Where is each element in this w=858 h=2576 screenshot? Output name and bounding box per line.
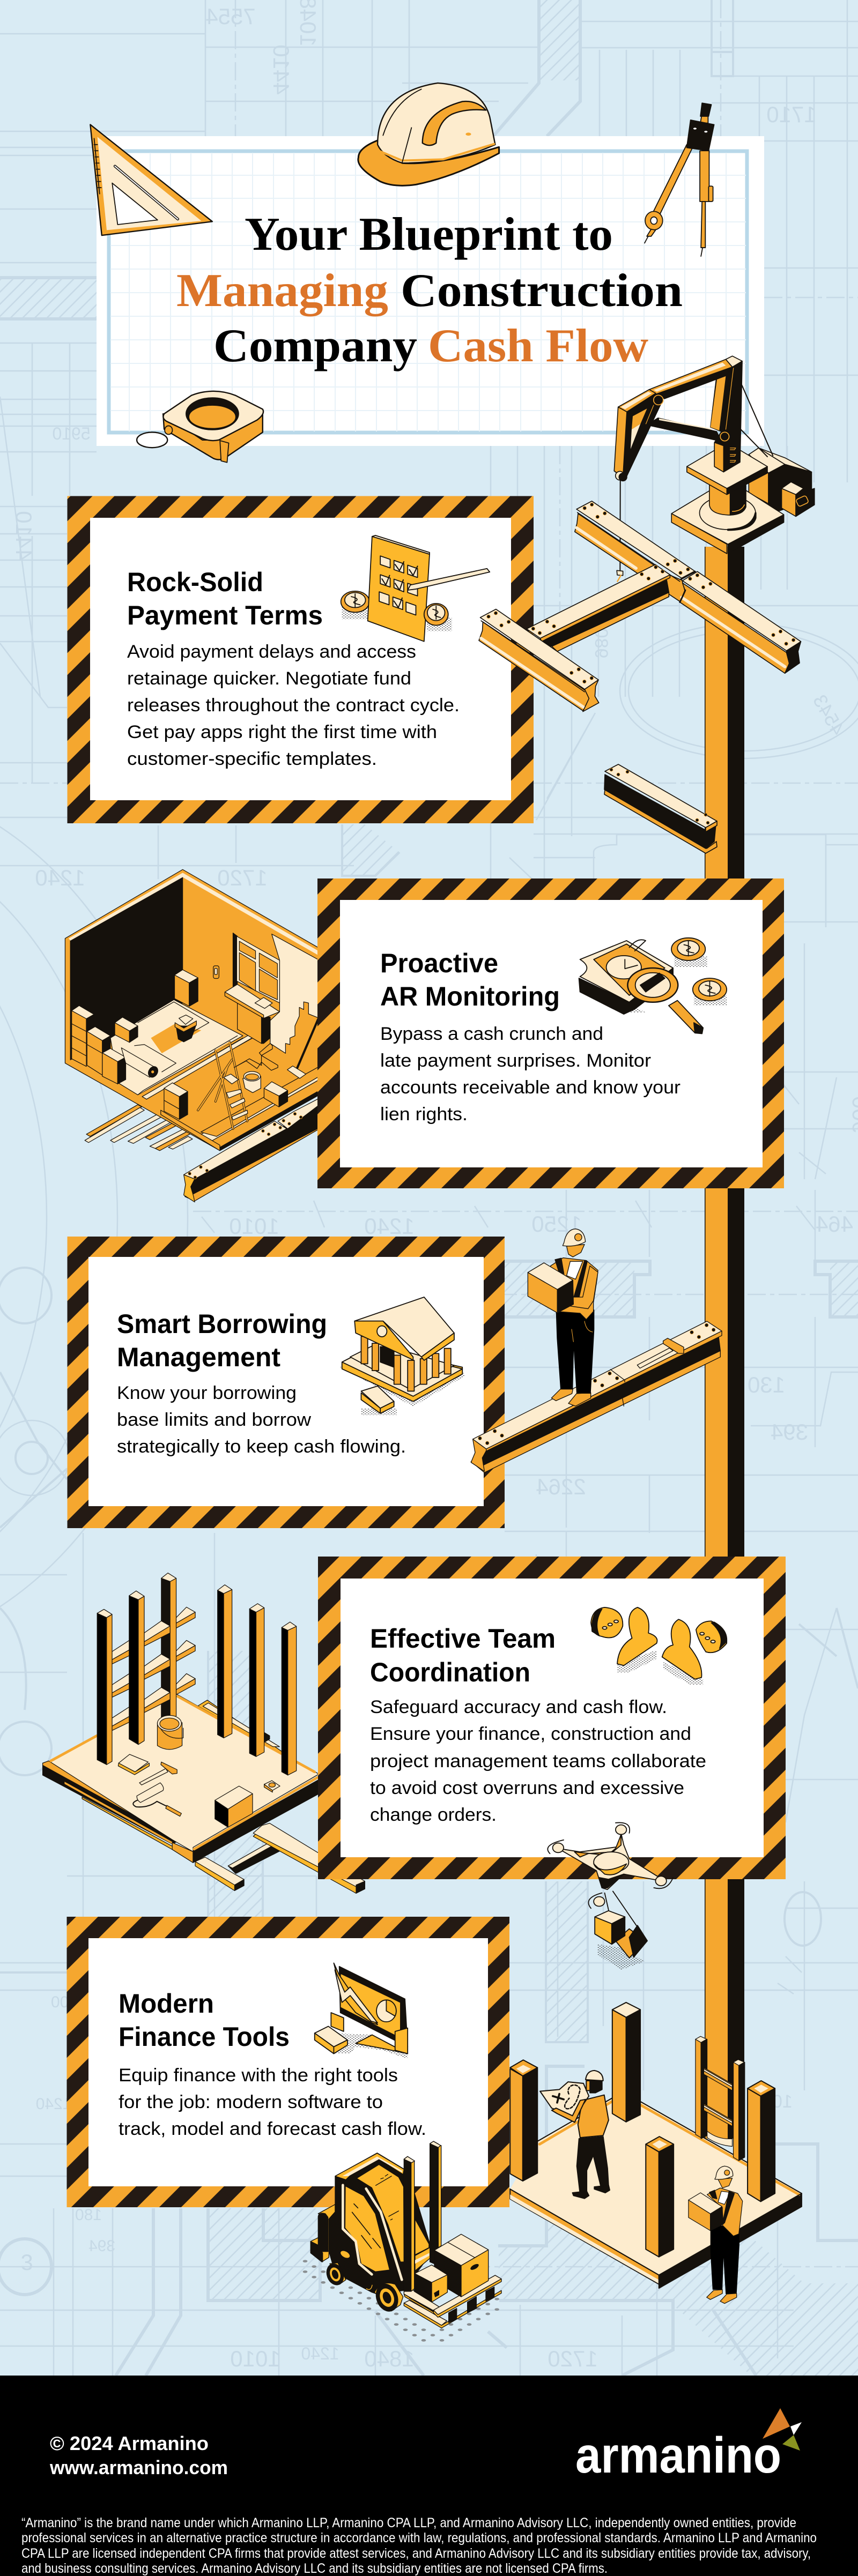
copyright and website: www.armanino.com bbox=[49, 2456, 228, 2478]
body text: base limits and borrow bbox=[117, 1410, 311, 1430]
paint bucket bbox=[157, 1715, 183, 1749]
crane cables bbox=[741, 384, 773, 457]
short left beam bbox=[479, 609, 599, 712]
heading: Rock-Solid bbox=[127, 567, 263, 597]
crane mast and boom bbox=[614, 356, 742, 480]
Armanino logo: armanino bbox=[575, 2427, 781, 2484]
crane upper plate bbox=[687, 450, 767, 495]
body text: project management teams collaborate bbox=[370, 1751, 706, 1771]
worker with map bbox=[540, 2071, 610, 2199]
drone shadow dots bbox=[597, 1944, 645, 1970]
blueprint background drawing: 7554 bbox=[205, 4, 256, 29]
steel tower column bbox=[705, 547, 744, 2139]
body text: change orders. bbox=[370, 1805, 497, 1825]
legal disclaimer: and business consulting services. Armanino Advisory LLC and its subsidiary entities are not licensed CPA firms. bbox=[21, 2561, 608, 2576]
drone cables bbox=[605, 1891, 638, 1927]
panel: Smart Borrowing Management bbox=[68, 1237, 505, 1528]
copyright and website bbox=[49, 2432, 228, 2478]
window and sill bbox=[213, 933, 279, 1044]
body text: Avoid payment delays and access bbox=[127, 642, 416, 662]
heading: Payment Terms bbox=[127, 600, 323, 630]
floor planks bbox=[85, 1105, 194, 1151]
drone body bbox=[548, 1822, 673, 1908]
ladder bbox=[696, 2036, 745, 2161]
panel: Effective Team Coordination bbox=[318, 1557, 786, 1879]
illustration: worker standing on steel beam bbox=[471, 1229, 722, 1472]
panel: Proactive AR Monitoring bbox=[317, 878, 784, 1188]
blueprint background drawing: 5910 bbox=[52, 424, 91, 443]
beam rivets bbox=[487, 503, 795, 683]
illustration: delivery drone with boxes bbox=[548, 1822, 673, 1970]
blueprint background drawing: 1250 bbox=[531, 1211, 582, 1237]
pallet bbox=[404, 2275, 501, 2328]
body text: for the job: modern software to bbox=[119, 2092, 383, 2112]
pillar left bbox=[510, 2060, 537, 2181]
blueprint background drawing: 130 bbox=[748, 1372, 785, 1397]
blueprint background drawing: 2264 bbox=[536, 1474, 586, 1499]
blueprint background drawing: 3 bbox=[20, 2250, 33, 2275]
body text: Know your borrowing bbox=[117, 1383, 297, 1403]
wooden crate bbox=[215, 1786, 253, 1827]
body text: customer-specific templates. bbox=[127, 749, 377, 769]
heading bbox=[380, 948, 560, 1011]
heading: Finance Tools bbox=[119, 2022, 290, 2052]
panel: Modern Finance Tools bbox=[66, 1917, 509, 2207]
body text: retainage quicker. Negotiate fund bbox=[127, 668, 411, 689]
forklift masts bbox=[415, 2141, 441, 2271]
body text: Equip finance with the right tools bbox=[119, 2065, 398, 2086]
platform deck bbox=[43, 1694, 319, 1863]
tower base disc bbox=[707, 2131, 733, 2146]
illustration: framed floor platform with studs and tools bbox=[43, 1573, 365, 1893]
crane bbox=[614, 356, 815, 582]
heading: AR Monitoring bbox=[380, 981, 560, 1011]
blueprint background drawing: 394 bbox=[88, 2237, 115, 2255]
wheels bbox=[324, 2261, 403, 2314]
icon: tape measure bbox=[137, 391, 263, 463]
icon: drafting compass bbox=[645, 103, 714, 256]
blueprint background drawing: 180 bbox=[75, 2206, 102, 2224]
body text: to avoid cost overruns and excessive bbox=[370, 1778, 684, 1798]
wall patch bbox=[270, 934, 320, 1053]
icon: paper stack, magnifier and coins bbox=[579, 938, 727, 1033]
cab bbox=[329, 2153, 430, 2294]
body text: track, model and forecast cash flow. bbox=[119, 2119, 426, 2139]
crane hook and cable bbox=[616, 471, 627, 582]
blueprint background drawing: 1720 bbox=[548, 2346, 598, 2371]
blueprint background drawing: 1240 bbox=[364, 1213, 415, 1239]
blueprint background drawing: 4410 bbox=[11, 511, 36, 561]
blueprint background drawing: 1720 bbox=[217, 865, 268, 890]
floor cutout bbox=[234, 1044, 278, 1070]
heading: Coordination bbox=[370, 1657, 530, 1687]
body text: accounts receivable and know your bbox=[380, 1077, 681, 1098]
heading bbox=[370, 1624, 556, 1687]
steel beam bbox=[471, 1321, 722, 1472]
blueprint background drawing: 4543 bbox=[809, 691, 849, 739]
angled connecting beam bbox=[527, 564, 670, 651]
copyright and website: © 2024 Armanino bbox=[50, 2432, 209, 2454]
blueprint background drawing: 1010 bbox=[229, 1213, 279, 1239]
title heading bbox=[176, 209, 683, 372]
rails and studs bbox=[97, 1573, 297, 1775]
body text: lien rights. bbox=[380, 1104, 468, 1125]
blueprint background drawing: 1240 bbox=[301, 2344, 339, 2363]
heading: Management bbox=[117, 1342, 280, 1372]
body text: Bypass a cash crunch and bbox=[380, 1024, 603, 1044]
support beams bbox=[82, 1700, 365, 1893]
cargo boxes bbox=[415, 2234, 489, 2302]
steel beam on tower bbox=[604, 764, 717, 853]
title heading: Company bbox=[213, 320, 417, 372]
crane motor small block bbox=[782, 482, 815, 516]
worker carrying box bbox=[689, 2166, 743, 2304]
icon: checklist tablet with coins bbox=[341, 535, 490, 642]
crane lower base plate bbox=[671, 485, 784, 554]
body text: Safeguard accuracy and cash flow. bbox=[370, 1697, 667, 1717]
step ladder bbox=[198, 1043, 248, 1129]
room shell and floor bbox=[65, 869, 320, 1151]
body text bbox=[380, 1024, 681, 1125]
icon: two people with speech bubbles bbox=[591, 1607, 727, 1685]
illustration: forklift with pallet of boxes bbox=[303, 2141, 501, 2342]
illustration: construction platform with workers bbox=[510, 2002, 802, 2304]
icon: set square triangle bbox=[90, 124, 212, 235]
heading: Effective Team bbox=[370, 1624, 556, 1654]
legal disclaimer bbox=[21, 2515, 817, 2576]
blueprint background drawing: 1010 bbox=[752, 2091, 793, 2112]
blueprint background drawing: 464 bbox=[816, 1211, 853, 1237]
steel beams over panel one bbox=[479, 501, 801, 712]
footer band bbox=[0, 2376, 858, 2576]
heading bbox=[117, 1309, 327, 1372]
stacked boxes bbox=[72, 970, 288, 1119]
center pillar front bbox=[646, 2136, 674, 2257]
counterweight bbox=[310, 2205, 335, 2262]
body text bbox=[119, 2065, 426, 2139]
heading bbox=[127, 567, 323, 630]
body text bbox=[370, 1697, 706, 1825]
body text: strategically to keep cash flowing. bbox=[117, 1436, 406, 1457]
blueprint background drawing: 1240 bbox=[35, 865, 85, 890]
heading: Proactive bbox=[380, 948, 498, 978]
blueprint background drawing: 980 bbox=[591, 628, 611, 658]
blueprint background drawing: 1840 bbox=[364, 2346, 415, 2371]
illustration: isometric room under construction bbox=[65, 869, 320, 1202]
body text bbox=[127, 642, 460, 769]
title heading: Construction bbox=[401, 265, 683, 317]
blueprint background drawing: 1710 bbox=[766, 102, 817, 127]
blueprint background drawing: 1240 bbox=[36, 2095, 71, 2113]
blueprint background drawing: 394 bbox=[771, 1419, 808, 1445]
icon: hard hat bbox=[358, 83, 499, 185]
title heading: Your Blueprint to bbox=[245, 209, 613, 260]
mop stick bbox=[287, 1016, 320, 1078]
front mast bbox=[404, 2156, 415, 2291]
heading bbox=[119, 1989, 290, 2052]
blueprint background drawing: 300 bbox=[51, 1993, 78, 2011]
body text: Get pay apps right the first time with bbox=[127, 722, 437, 742]
body text: late payment surprises. Monitor bbox=[380, 1051, 651, 1071]
title heading: Cash Flow bbox=[428, 320, 648, 372]
platform deck bbox=[510, 2098, 802, 2288]
hanging boxes bbox=[595, 1911, 647, 1958]
lower I-beam bbox=[184, 1098, 320, 1202]
blueprint background drawing: 1010 bbox=[230, 2346, 280, 2371]
ground dots bbox=[303, 2260, 499, 2342]
body text bbox=[117, 1383, 406, 1457]
title panel bbox=[97, 136, 764, 446]
back pillar bbox=[612, 2002, 640, 2122]
blueprint background drawing: 4410 bbox=[269, 44, 294, 95]
panel: Rock-Solid Payment Terms bbox=[68, 496, 534, 823]
floor roll, bin, bucket bbox=[121, 1015, 261, 1093]
crane motor housing bbox=[749, 448, 811, 515]
title heading: Managing bbox=[176, 265, 388, 317]
pillar right bbox=[748, 2081, 775, 2201]
icon: bank building and money bbox=[341, 1297, 465, 1415]
icon: financial chart on monitor bbox=[315, 1963, 408, 2059]
heading: Smart Borrowing bbox=[117, 1309, 327, 1339]
tools on deck bbox=[118, 1754, 280, 1816]
body text: releases throughout the contract cycle. bbox=[127, 695, 460, 716]
worker figure bbox=[528, 1229, 598, 1406]
body text: Ensure your finance, construction and bbox=[370, 1724, 691, 1744]
long cross beam bbox=[575, 501, 801, 673]
heading: Modern bbox=[119, 1989, 214, 2019]
